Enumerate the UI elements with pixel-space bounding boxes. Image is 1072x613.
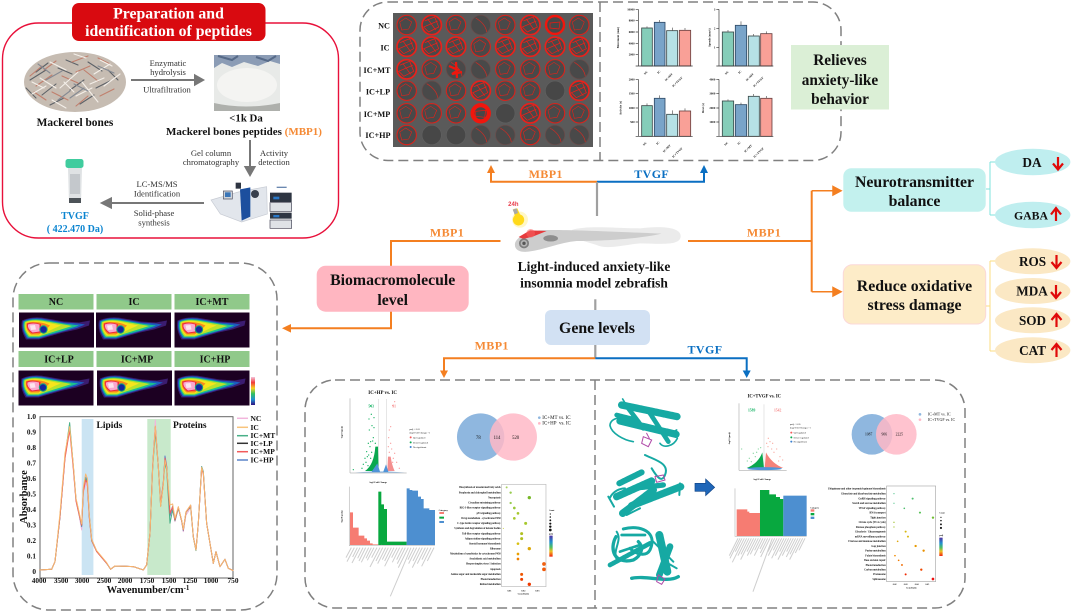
bar chart: activity: Activity (s) <box>619 101 623 115</box>
x axis ticks: 1000 <box>204 576 219 585</box>
label: model name: Light-induced anxiety-like <box>518 259 670 274</box>
arrow: MBP1 to behavior <box>491 171 597 182</box>
spectrum legend: IC+LP <box>250 439 273 448</box>
band label: proteins: Proteins <box>173 421 207 431</box>
connector: right branch <box>688 191 812 292</box>
band label: lipids: Lipids <box>96 421 123 431</box>
KEGG dot plot: padj <box>549 533 553 535</box>
arrow: identification <box>102 198 204 208</box>
venn diagram: IC+MT and IC+HP: 78 <box>476 436 481 441</box>
spectrum legend: IC+HP <box>250 456 274 464</box>
spectrum lines <box>39 420 233 571</box>
image: mass spectrometer <box>211 183 292 228</box>
arrow: MBP1 to gene panel <box>444 358 595 372</box>
KEGG dot plot: Herpes simplex virus 1 infection <box>466 563 501 566</box>
y axis ticks: 1.0 <box>27 412 36 421</box>
KEGG dot plot: 0.05 <box>925 584 929 586</box>
plate row labels: NC <box>378 22 390 30</box>
bar chart: movement: IC <box>656 70 661 75</box>
plate row labels: IC+LP <box>366 88 390 96</box>
KEGG dot plot: Base excision repair <box>864 559 887 562</box>
text: activity detection: Activity <box>260 148 288 158</box>
KEGG dot plot: RIG-I-like receptor signaling pathway <box>460 507 501 510</box>
label: TVGF top: TVGF <box>634 167 669 181</box>
KEGG dot plot: Ubiquinone and other terpenoid-quinone biosynthesis <box>828 488 886 491</box>
bar chart: speeds: NC <box>724 70 730 76</box>
KEGG dot plot: Gap junction <box>871 545 886 548</box>
KEGG dot plot: GeneRatio <box>906 586 917 589</box>
spectrum legend <box>237 414 275 464</box>
volcano plot: IC+HP vs IC: 543 <box>368 405 374 409</box>
thermal image labels: IC <box>128 297 140 308</box>
box: gene levels: Gene levels <box>559 320 635 337</box>
box: neurotransmitter balance: balance <box>889 193 940 210</box>
KEGG dot plot: Apoptosis <box>490 568 501 571</box>
x axis ticks: 4000 <box>32 576 47 585</box>
KEGG dot plot: Metabolism of xenobiotics by cytochrome P450 <box>450 553 501 556</box>
volcano plot: IC+TVGF vs IC: Up-regulated <box>794 432 807 435</box>
KEGG dot plot: p53 signaling pathway <box>477 512 501 515</box>
KEGG dot plot: Pentose phosphate pathway <box>856 526 886 529</box>
x axis ticks: 750 <box>228 576 239 585</box>
volcano plot: IC+TVGF vs IC: padj < 0.05 <box>790 423 801 426</box>
KEGG dot plot: 0.04 <box>915 584 919 586</box>
KEGG dot plot: Count <box>939 513 945 515</box>
KEGG dot plot: 0.02 <box>893 584 897 586</box>
arrow: purification <box>246 140 254 175</box>
KEGG dot plot: padj <box>939 535 943 537</box>
bar chart: rest: 1000 <box>709 120 716 124</box>
spectrum legend: IC <box>250 423 259 432</box>
bar chart: activity: 500 <box>630 120 635 124</box>
KEGG dot plot: Drug metabolism - cytochrome P450 <box>461 517 501 520</box>
bar chart: activity: IC <box>655 141 660 146</box>
box: gene levels <box>545 310 650 345</box>
KEGG dot plot: Synthesis and degradation of ketone bodies <box>454 527 501 530</box>
KEGG dot plot: Phototransduction <box>866 564 886 567</box>
box: biomacromolecule level <box>317 266 469 312</box>
KEGG dot plot: 0.01 <box>507 590 512 593</box>
volcano plot: IC+TVGF vs IC: 1542 <box>774 408 781 412</box>
KEGG dot plot: Necroptosis <box>488 496 501 499</box>
KEGG dot plot: Circadian entraining pathway <box>468 502 501 505</box>
text: LC-MS/MS identification: Identification <box>134 188 181 198</box>
venn diagram: IC+MT and IC+TVGF: 1087 <box>865 433 872 437</box>
KEGG dot plot: Fructose and mannose metabolism <box>848 540 887 543</box>
bar chart: movement: Movement (mm) <box>616 27 620 48</box>
zebrafish tracking plate <box>393 13 593 147</box>
marker: CAT increase: CAT <box>1019 343 1046 358</box>
KEGG dot plot: Starch and sucrose metabolism <box>852 502 887 505</box>
bar chart: rest: IC <box>737 141 742 146</box>
marker: GABA increase <box>995 202 1070 228</box>
volcano plot: IC+TVGF vs IC: 1589 <box>748 408 755 412</box>
x axis ticks <box>32 576 239 585</box>
connector: model to gene levels <box>594 299 596 310</box>
protein structure 2 <box>608 455 681 515</box>
text: solid-phase synthesis: Solid-phase <box>134 208 174 218</box>
bar chart: rest <box>701 77 773 159</box>
thermal image labels: IC+HP <box>200 354 230 366</box>
x axis title: -1 <box>184 584 190 592</box>
text: solid-phase synthesis: synthesis <box>138 218 170 228</box>
y axis title: Absorbance <box>19 470 30 524</box>
bar charts: behavior <box>616 7 773 159</box>
arrowhead: TVGF behavior <box>700 165 708 173</box>
arrow: hydrolysis <box>131 76 203 84</box>
KEGG dot plot: Amino sugar and nucleotide sugar metabolism <box>451 573 502 576</box>
volcano plot: IC+TVGF vs IC: No significant <box>794 441 807 444</box>
KEGG dot plot: Folate biosynthesis <box>865 554 886 557</box>
spectrum legend: NC <box>250 414 261 423</box>
volcano plot: IC+HP vs IC: IC+HP vs. IC <box>368 391 397 396</box>
marker: DA decrease: DA <box>1022 155 1042 170</box>
zebrafish larva <box>515 227 681 252</box>
text: LC-MS/MS identification: LC-MS/MS <box>136 179 178 189</box>
thermal image labels: IC+MT <box>196 297 229 308</box>
volcano plot: IC+HP vs IC: 91 <box>392 405 396 409</box>
x axis ticks: 1500 <box>162 576 177 585</box>
venn diagram: IC+MT and IC+TVGF: 906 <box>882 433 887 437</box>
callout: relieves anxiety-like behavior: behavior <box>811 91 869 108</box>
x axis ticks: 1250 <box>183 576 198 585</box>
bar chart: rest: 3000 <box>709 92 716 96</box>
label: MBP1 left: MBP1 <box>430 226 464 240</box>
volcano plot: IC+HP vs IC: Up-regulated <box>413 436 426 439</box>
volcano plot: IC+TVGF vs IC: log2 Fold Change <box>754 478 771 481</box>
bar chart: activity: IC+TVGF <box>671 146 684 159</box>
KEGG dot plot: Arachidonic acid metabolism <box>469 558 502 561</box>
text: gel column chromatography: chromatography <box>183 157 240 167</box>
panel: gene level results <box>305 380 965 608</box>
KEGG dot plot: GeneRatio <box>518 593 530 596</box>
KEGG dot plot: mRNA surveillance pathway <box>855 535 886 538</box>
label: MBP1 bottom: MBP1 <box>475 338 509 352</box>
bar chart: movement: 6000 <box>629 30 635 34</box>
label: mackerel bones peptides MBP1: Mackerel bones peptides (MBP1) <box>166 126 322 138</box>
bar chart: activity: 2000 <box>629 77 635 81</box>
label: mackerel bones: Mackerel bones <box>37 117 114 129</box>
y axis ticks: 0.4 <box>27 505 36 514</box>
KEGG dot plot: Spliceosome <box>872 578 887 581</box>
KEGG dot plot: Adipocytokine signaling pathway <box>465 537 501 540</box>
bar chart: rest: Rest (s) <box>701 103 705 113</box>
y axis ticks: 0.9 <box>27 428 36 436</box>
box: reduce oxidative stress damage: stress damage <box>867 297 962 314</box>
KEGG dot plot: Ribosome <box>490 547 502 550</box>
KEGG dot plot: Carbon metabolism <box>864 568 887 571</box>
KEGG dot plot: Citrate cycle (TCA cycle) <box>859 521 886 524</box>
GO bar chart: Category <box>810 506 820 509</box>
y axis ticks: 0.8 <box>27 443 36 452</box>
plate row labels: IC+MT <box>364 66 391 75</box>
label: TVGF mass: ( 422.470 Da) <box>47 224 103 235</box>
volcano plot: IC+TVGF vs IC <box>728 395 811 481</box>
panel: preparation and identification of peptides <box>2 3 338 238</box>
protein structure 3 <box>610 528 678 584</box>
marker: SOD increase: SOD <box>1019 313 1046 328</box>
KEGG dot plot: Phototransduction <box>481 578 501 581</box>
arrow: TVGF to gene panel <box>595 358 747 372</box>
GO bar chart: Category <box>439 509 449 512</box>
volcano plot: IC+TVGF vs IC: Down-regulated <box>794 436 810 439</box>
bar chart: rest: 2000 <box>709 106 716 110</box>
label: under 1k Da: <1k Da <box>229 112 263 124</box>
thermal colour scale <box>251 377 255 405</box>
box: reduce oxidative stress damage <box>843 265 986 324</box>
marker: SOD increase <box>995 307 1070 333</box>
arrow: to oxidative stress <box>812 288 841 296</box>
box: neurotransmitter balance <box>843 168 986 212</box>
connector: model to biomacromolecule <box>391 241 500 266</box>
thermal image labels: IC+MP <box>121 354 153 366</box>
x axis ticks: 2500 <box>97 576 112 585</box>
heading: preparation: identification of peptides <box>85 23 252 40</box>
bar chart: movement: IC+TVGF <box>671 76 684 88</box>
marker: GABA increase: GABA <box>1014 208 1049 222</box>
venn diagram: IC+MT and IC+HP: IC+HP vs. IC <box>542 422 572 427</box>
volcano plot: IC+TVGF vs IC: IC+TVGF vs. IC <box>748 395 782 400</box>
KEGG dot plot: 0.03 <box>535 590 540 593</box>
bar chart: activity <box>619 77 693 159</box>
x axis ticks: 1750 <box>140 576 155 585</box>
GO bar chart <box>729 488 820 592</box>
KEGG dot plot: Purine metabolism <box>865 550 887 553</box>
KEGG dot plot <box>828 486 945 589</box>
KEGG dot plot: VEGF signaling pathway <box>859 507 886 510</box>
venn diagram: IC+MT and IC+TVGF: 2225 <box>896 433 903 437</box>
y axis ticks: 0.1 <box>27 552 36 560</box>
KEGG dot plot: Biosynthesis of unsaturated fatty acids <box>459 486 501 489</box>
KEGG dot plot: Tight junction <box>870 516 886 519</box>
KEGG dot plot: Retinol metabolism <box>480 583 502 586</box>
connector: oxidative markers <box>986 261 996 351</box>
thermal image labels: NC <box>49 297 63 308</box>
KEGG dot plot: Steroid hormone biosynthesis <box>469 542 501 545</box>
bar chart: activity: 1500 <box>629 92 635 96</box>
plate row labels: IC+HP <box>365 131 391 140</box>
label: MBP1 right: MBP1 <box>747 226 781 240</box>
arrow: biomacromolecule to panel <box>289 311 391 328</box>
illustration: zebrafish light model <box>508 202 681 252</box>
y axis ticks <box>27 412 36 576</box>
image: peptide tube <box>66 159 84 203</box>
box: neurotransmitter balance: Neurotransmitter <box>855 174 974 191</box>
callout: relieves anxiety-like behavior: anxiety-like <box>802 72 878 89</box>
label: model name: insomnia model zebrafish <box>520 276 668 290</box>
venn diagram: IC+MT and IC+HP <box>457 413 572 461</box>
volcano plot: IC+HP vs IC: Down-regulated <box>413 441 429 444</box>
venn diagram: IC+MT and IC+TVGF: IC+MT vs. IC <box>928 412 951 417</box>
plate row labels <box>364 22 391 140</box>
y axis ticks: 0.2 <box>27 536 36 545</box>
y axis ticks: 0 <box>32 567 36 576</box>
KEGG dot plot: Proteasome <box>873 573 887 576</box>
bar chart: movement: NC <box>643 70 649 76</box>
y axis ticks: 0.3 <box>27 520 36 530</box>
volcano plot: IC+HP vs IC: log2 Fold Change <box>370 481 387 484</box>
bar chart: movement: 2000 <box>629 53 635 57</box>
thermal image labels: IC+LP <box>44 354 74 366</box>
connector: gene levels down <box>594 345 596 358</box>
KEGG dot plot: Glycolysis / Gluconeogenesis <box>855 531 886 534</box>
KEGG dot plot: 0.03 <box>904 584 908 586</box>
arrowhead: biomacromolecule panel <box>282 324 291 333</box>
volcano plot: IC+HP vs IC: No significant <box>413 446 427 449</box>
KEGG dot plot: RNA transport <box>869 512 886 515</box>
image: mackerel bones <box>24 52 126 112</box>
thermal images <box>18 312 250 406</box>
marker: ROS decrease <box>995 248 1070 274</box>
protein structure 1 <box>610 399 677 447</box>
sub-panel: MBP1 transcriptomics <box>341 391 572 596</box>
label: TVGF bottom: TVGF <box>688 342 722 356</box>
bar chart: rest: 4000 <box>709 77 716 81</box>
bar chart: speeds: 2 <box>714 26 716 30</box>
y axis ticks: 0.7 <box>27 458 36 468</box>
x axis ticks: 3500 <box>54 576 69 585</box>
venn diagram: IC+MT and IC+TVGF: IC+TVGF vs. IC <box>928 417 955 422</box>
KEGG dot plot: Glyoxylate and dicarboxylate metabolism <box>841 492 887 495</box>
text: activity detection: detection <box>258 157 290 167</box>
sub-panel: TVGF transcriptomics <box>608 395 955 592</box>
connector: neurotransmitters <box>986 162 996 215</box>
arrowhead: TVGF gene <box>743 370 751 378</box>
heading: preparation <box>72 3 266 41</box>
panel: behavior results <box>360 2 841 160</box>
heading: preparation: Preparation and <box>113 6 224 22</box>
volcano plot: IC+HP vs IC: -log10 (padj) <box>341 426 344 439</box>
box: biomacromolecule level: level <box>377 292 409 309</box>
GO bar chart <box>341 487 449 596</box>
KEGG dot plot: C-type lectin receptor signaling pathway <box>457 522 501 525</box>
bar chart: rest: IC+MT <box>743 144 753 153</box>
GO bar chart: -log10 (padj) <box>341 510 344 523</box>
bar chart: movement <box>616 7 693 88</box>
FTIR spectrum chart <box>19 412 275 596</box>
x axis ticks: 3000 <box>75 576 90 585</box>
text: ultrafiltration: Ultrafiltration <box>143 84 192 94</box>
label: MBP1 top: MBP1 <box>529 167 563 181</box>
text: hydrolysis: hydrolysis <box>150 67 187 77</box>
spectrum legend: IC+MT <box>250 431 275 440</box>
box: biomacromolecule level: Biomacromolecule <box>330 272 455 289</box>
volcano plot: IC+HP vs IC: padj < 0.05 <box>409 428 421 431</box>
y axis ticks: 0.5 <box>27 490 36 498</box>
venn diagram: IC+MT and IC+TVGF <box>852 412 955 455</box>
KEGG dot plot: GnRH signaling pathway <box>858 497 886 500</box>
arrow: to neurotransmitter balance <box>812 186 841 195</box>
y axis ticks: 0.6 <box>27 474 36 483</box>
x axis title: Wavenumber/cm <box>107 585 184 596</box>
bar chart: activity: NC <box>642 141 648 147</box>
volcano plot: IC+HP vs IC: |log2 Fold Change| >1 <box>409 431 431 434</box>
light bulb with 24h: 24h <box>508 202 519 208</box>
x axis ticks: 2000 <box>118 576 133 585</box>
callout: relieves anxiety-like behavior: Relieves <box>813 52 867 69</box>
venn diagram: IC+MT and IC+HP: IC+MT vs. IC <box>542 416 571 421</box>
plate row labels: IC <box>380 44 390 52</box>
volcano plot: IC+TVGF vs IC: |log2 Fold Change| >1 <box>790 426 811 429</box>
bar chart: speeds: 1 <box>714 45 716 49</box>
bar chart: speeds: IC+MT <box>745 72 755 82</box>
marker: CAT increase <box>995 337 1070 363</box>
bar chart: movement: IC+MT <box>664 72 674 82</box>
callout: relieves anxiety-like behavior <box>791 45 889 110</box>
text: enzymatic hydrolysis: Enzymatic <box>150 58 187 68</box>
venn diagram: IC+MT and IC+HP: 520 <box>512 436 520 441</box>
bar chart: speeds <box>708 7 773 88</box>
volcano plot: IC+HP vs IC <box>341 391 431 484</box>
bar chart: speeds: IC <box>737 70 742 75</box>
thermal image labels <box>18 294 250 367</box>
bar chart: rest: IC+TVGF <box>753 146 765 159</box>
protein docking structures <box>608 399 681 584</box>
KEGG dot plot: Count <box>549 510 555 512</box>
arrowhead: MBP1 behavior <box>487 165 495 173</box>
marker: MDA decrease <box>995 278 1070 304</box>
KEGG dot plot: Toll-like receptor signaling pathway <box>462 532 501 535</box>
bar chart: speeds: 3 <box>714 7 716 11</box>
connector: model to behavior <box>596 182 598 216</box>
bar chart: movement: 8000 <box>629 19 635 23</box>
bar chart: rest: NC <box>723 141 729 147</box>
KEGG dot plot <box>450 484 555 596</box>
marker: MDA decrease: MDA <box>1016 284 1048 298</box>
light bulb with 24h <box>508 202 528 228</box>
label: model name <box>518 259 670 290</box>
text: gel column chromatography: Gel column <box>191 148 231 158</box>
plate row labels: IC+MP <box>364 110 390 119</box>
arrowhead: MBP1 gene <box>440 370 448 378</box>
panel: biomacromolecule results <box>13 263 277 610</box>
bar chart: activity: 1000 <box>629 106 635 110</box>
bar chart: speeds: Speeds (mm/s) <box>708 28 712 47</box>
image: peptide powder <box>214 55 280 111</box>
marker: ROS decrease: ROS <box>1019 254 1046 269</box>
KEGG dot plot: Porphyrin and chlorophyll metabolism <box>459 491 502 494</box>
bar chart: activity: IC+MT <box>662 144 672 153</box>
bar chart: movement: 10000 <box>627 7 635 11</box>
KEGG dot plot: 0.02 <box>521 590 526 593</box>
volcano plot: IC+TVGF vs IC: -log10 (padj) <box>728 432 731 445</box>
arrow: TVGF to behavior <box>597 171 704 182</box>
label: TVGF: TVGF <box>61 211 89 222</box>
venn diagram: IC+MT and IC+HP: 114 <box>494 436 501 441</box>
marker: DA decrease <box>995 149 1070 175</box>
spectrum legend: IC+MP <box>250 447 275 456</box>
bar chart: movement: 4000 <box>629 41 635 45</box>
box: reduce oxidative stress damage: Reduce oxidative <box>857 278 972 295</box>
bar chart: speeds: IC+TVGF <box>752 76 765 88</box>
arrow: docking to transcriptomics <box>695 479 715 496</box>
